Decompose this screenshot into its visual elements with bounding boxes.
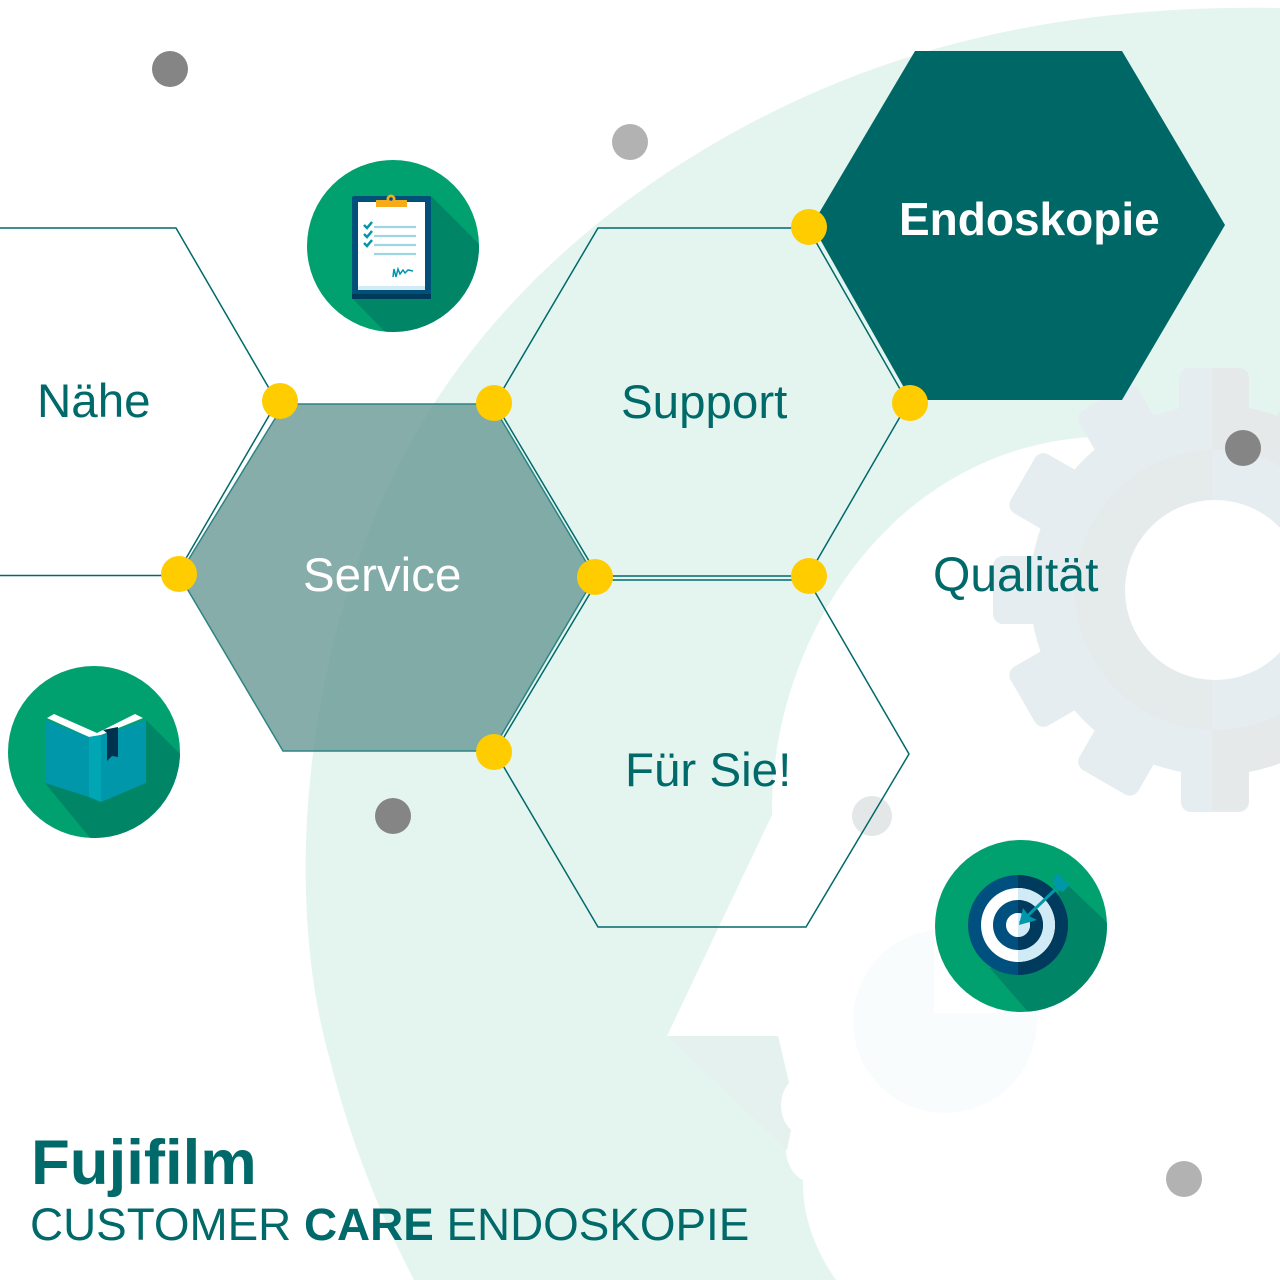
- label: Support: Support: [621, 376, 787, 429]
- hexagon: Service: [179, 404, 595, 751]
- hexagon: Endoskopie: [812, 51, 1225, 400]
- label: Endoskopie: Endoskopie: [899, 193, 1160, 245]
- label: Service: Service: [303, 549, 461, 602]
- icon: clipboard: [307, 160, 479, 332]
- background: pale green head shape: [306, 8, 1280, 1280]
- label: Für Sie!: Für Sie!: [625, 744, 791, 797]
- gear illustration: [993, 368, 1280, 812]
- hexagon: Support outline: [495, 228, 908, 576]
- title block: [30, 1128, 749, 1250]
- connector dots: [161, 209, 928, 770]
- label: Qualität: Qualität: [933, 549, 1098, 602]
- faint circle behind target icon: [853, 929, 1037, 1113]
- hexagon: Nähe open outline: [0, 228, 277, 576]
- icon: target with arrow: [935, 840, 1115, 1020]
- icon: open book: [8, 666, 180, 838]
- decorative grey dots: [152, 51, 1261, 1197]
- label: Nähe: Nähe: [37, 375, 151, 428]
- title: Fujifilm: Fujifilm: [31, 1128, 257, 1198]
- white square behind target icon: [934, 840, 1100, 1013]
- subtitle: Customer Care Endoskopie: CUSTOMER CARE ENDOSKOPIE: [30, 1199, 749, 1250]
- hexagon: Für Sie outline: [495, 580, 909, 927]
